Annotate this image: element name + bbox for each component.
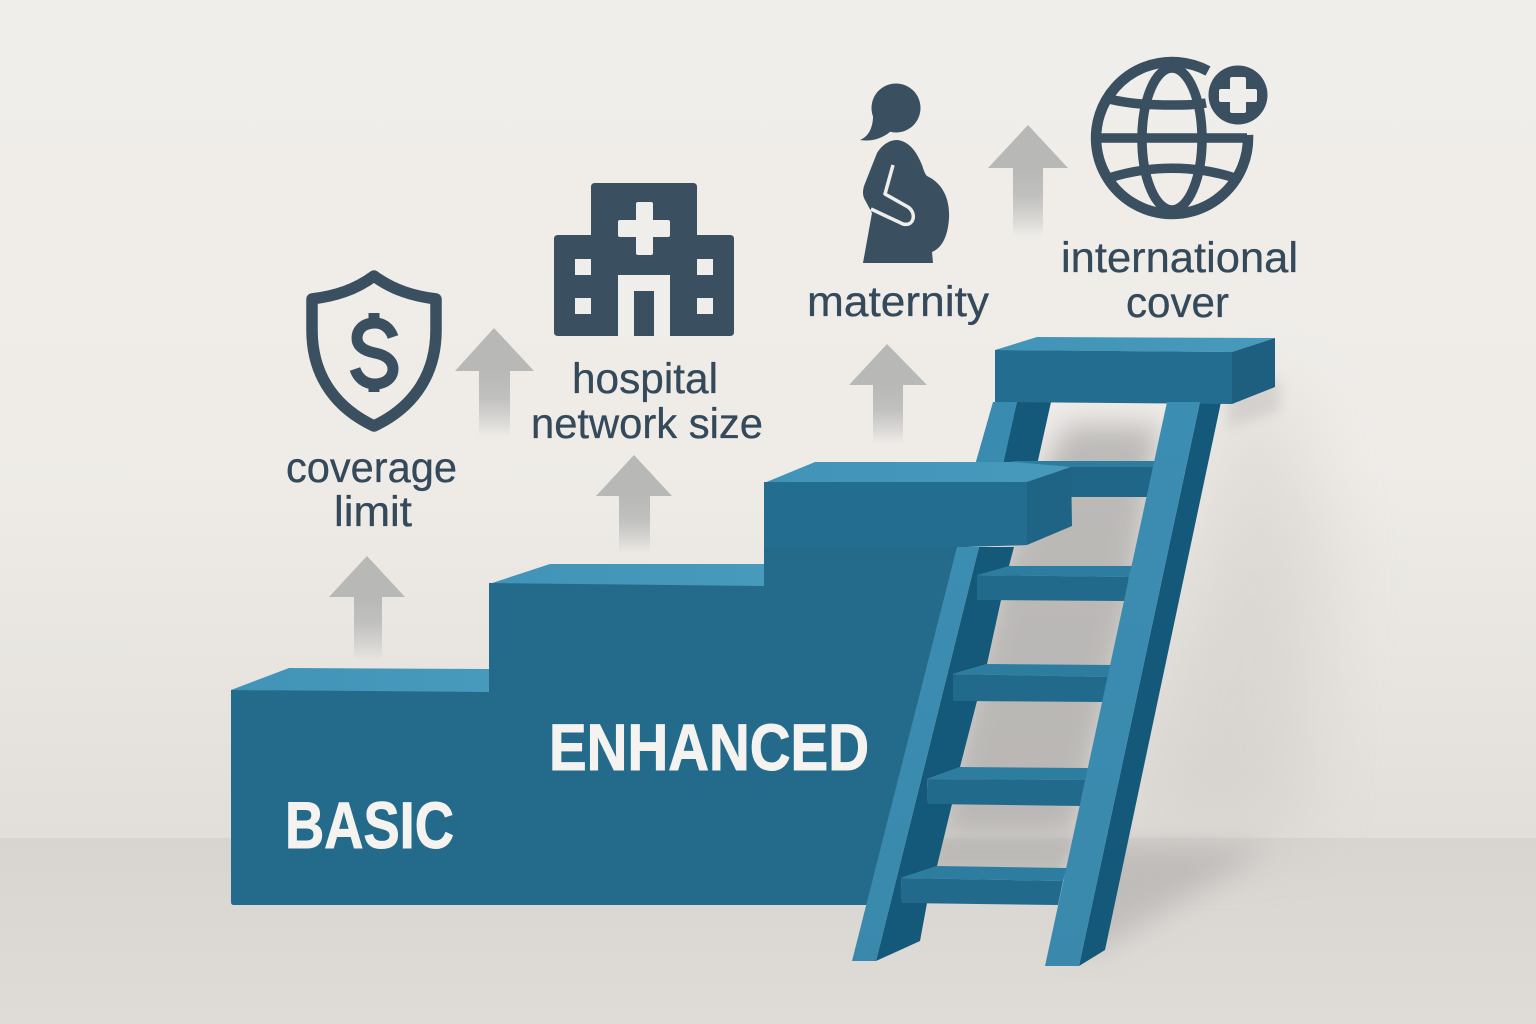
ladder: lower left rail front [852, 547, 979, 961]
label: international cover: international [1061, 234, 1298, 282]
label: hospital network size: network size [531, 400, 763, 448]
wall shadow cast by ladder [935, 378, 1330, 838]
ladder: right rail front [1045, 402, 1200, 966]
icon: globe with plus [1096, 62, 1268, 214]
label: hospital network size [531, 355, 763, 448]
icon: pregnant woman [860, 84, 949, 263]
label: hospital network size: hospital [572, 355, 718, 403]
top step overhang [764, 462, 1072, 547]
tier label: BASIC: BASIC [285, 788, 454, 862]
upward arrow 1 [329, 556, 405, 660]
icon: hospital [554, 183, 734, 336]
upward arrow 4 [849, 344, 927, 444]
upward arrow 5 [988, 125, 1068, 237]
upward arrow 3 [596, 455, 672, 553]
ladder: lower left rail dark side [876, 547, 1014, 961]
ladder: upper left rail [975, 402, 1051, 470]
label: international cover: cover [1126, 279, 1229, 327]
label: coverage limit: coverage [286, 444, 457, 492]
ladder: right rail dark side [1079, 402, 1221, 966]
label: maternity: maternity [807, 278, 989, 326]
label: coverage limit: limit [334, 488, 412, 536]
ladder: top rung behind step [1010, 461, 1155, 497]
upward arrow 2 [455, 328, 534, 437]
floor [0, 838, 1536, 1024]
ladder: rungs [901, 566, 1132, 905]
staircase body: Basic and Enhanced steps [231, 482, 1027, 905]
label: coverage limit [286, 444, 457, 536]
floor shadow cast by ladder [925, 838, 1270, 955]
label: international cover [1061, 234, 1298, 327]
icon: shield with dollar [312, 276, 436, 426]
tier label: ENHANCED: ENHANCED [549, 710, 869, 784]
top platform [995, 337, 1275, 404]
